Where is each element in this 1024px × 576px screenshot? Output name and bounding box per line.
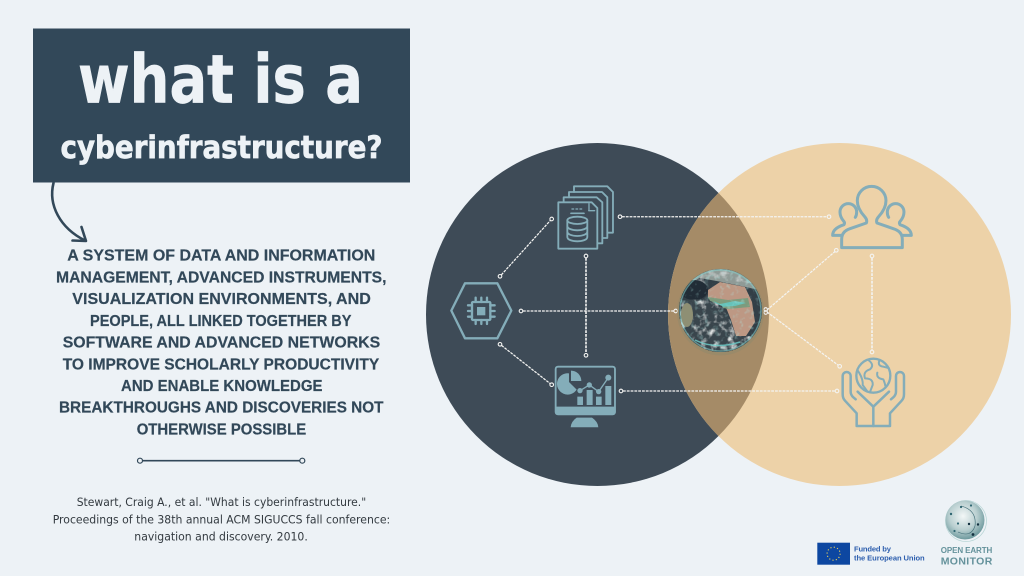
north atlantic (680, 280, 708, 300)
description text block: AND ENABLE KNOWLEDGE (121, 378, 323, 395)
venn diagram (426, 143, 1011, 486)
divider (138, 458, 305, 463)
description text block: PEOPLE, ALL LINKED TOGETHER BY (90, 313, 352, 330)
logo text: OPEN EARTH (941, 546, 993, 555)
citation: Stewart, Craig A., et al. "What is cyberinfrastructure." (77, 495, 366, 509)
venn circle: people and society (668, 143, 1011, 486)
africa (708, 282, 755, 336)
citation (53, 495, 390, 544)
title box (33, 28, 410, 182)
Open Earth Monitor logo: MONITOR (941, 556, 993, 568)
citation: Proceedings of the 38th annual ACM SIGUCCS fall conference: (53, 512, 390, 526)
atlantic clouds (680, 299, 748, 352)
citation: navigation and discovery. 2010. (134, 530, 308, 544)
sahel (708, 297, 750, 309)
icon: analytics monitor (555, 367, 616, 427)
description text block: BREAKTHROUGHS AND DISCOVERIES NOT (59, 400, 384, 417)
venn overlap (668, 193, 769, 436)
EU funding logo: the European Union (854, 554, 925, 562)
icon: people group (833, 186, 911, 248)
title: cyberinfrastructure?: cyberinfrastructure? (60, 130, 382, 166)
title: what is a: what is a (78, 40, 363, 118)
icon: processor chip in hexagon (451, 283, 511, 338)
icon: stacked data documents (558, 186, 613, 249)
description text block: TO IMPROVE SCHOLARLY PRODUCTIVITY (63, 356, 380, 373)
Open Earth Monitor logo (941, 500, 993, 568)
description text block: MANAGEMENT, ADVANCED INSTRUMENTS, (56, 269, 386, 286)
icon: hands holding globe (843, 359, 904, 426)
EU funding logo (817, 543, 925, 565)
logo globe (946, 500, 986, 542)
description text block: VISUALIZATION ENVIRONMENTS, AND (72, 291, 371, 308)
description text block: SOFTWARE AND ADVANCED NETWORKS (63, 334, 381, 352)
EU flag (817, 543, 850, 565)
top clouds (690, 269, 756, 290)
arrow from title to description (52, 183, 86, 241)
description text block: OTHERWISE POSSIBLE (137, 421, 307, 438)
earth satellite image (677, 266, 764, 358)
funded by text: Funded by (854, 544, 892, 554)
description text block (56, 248, 386, 438)
description text block: A SYSTEM OF DATA AND INFORMATION (67, 248, 375, 265)
connectors (498, 215, 874, 393)
venn circle: technology (426, 143, 769, 486)
